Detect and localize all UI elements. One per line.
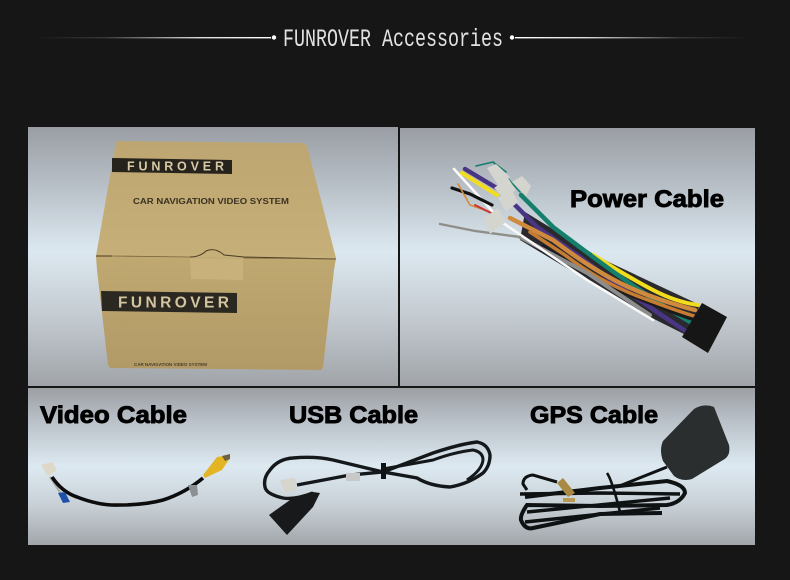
panel: box <box>28 127 398 386</box>
label: video cable: Video Cable <box>40 402 187 429</box>
icon: cardboard box: CAR NAVIGATION VIDEO SYSTEM <box>134 362 207 367</box>
panel: power cable <box>400 128 755 386</box>
title: FUNROVER Accessories <box>283 25 503 54</box>
icon: wire harness <box>440 162 700 335</box>
icon: cardboard box: FUNROVER <box>127 160 224 174</box>
icon: terminal clips <box>484 164 531 234</box>
icon: gps antenna <box>520 405 729 528</box>
title <box>35 25 751 54</box>
label: power cable: Power Cable <box>570 186 724 213</box>
icon: cardboard box: CAR NAVIGATION VIDEO SYSTEM <box>133 197 289 206</box>
icon: usb cable <box>265 442 490 535</box>
icon: video cable <box>41 454 230 505</box>
icon: cardboard box: FUNROVER <box>118 294 229 312</box>
panel: cables strip <box>28 388 755 545</box>
label: gps cable: GPS Cable <box>530 402 658 429</box>
icon: cardboard box <box>96 141 336 370</box>
icon: black connector <box>682 303 727 353</box>
label: usb cable: USB Cable <box>289 402 418 429</box>
